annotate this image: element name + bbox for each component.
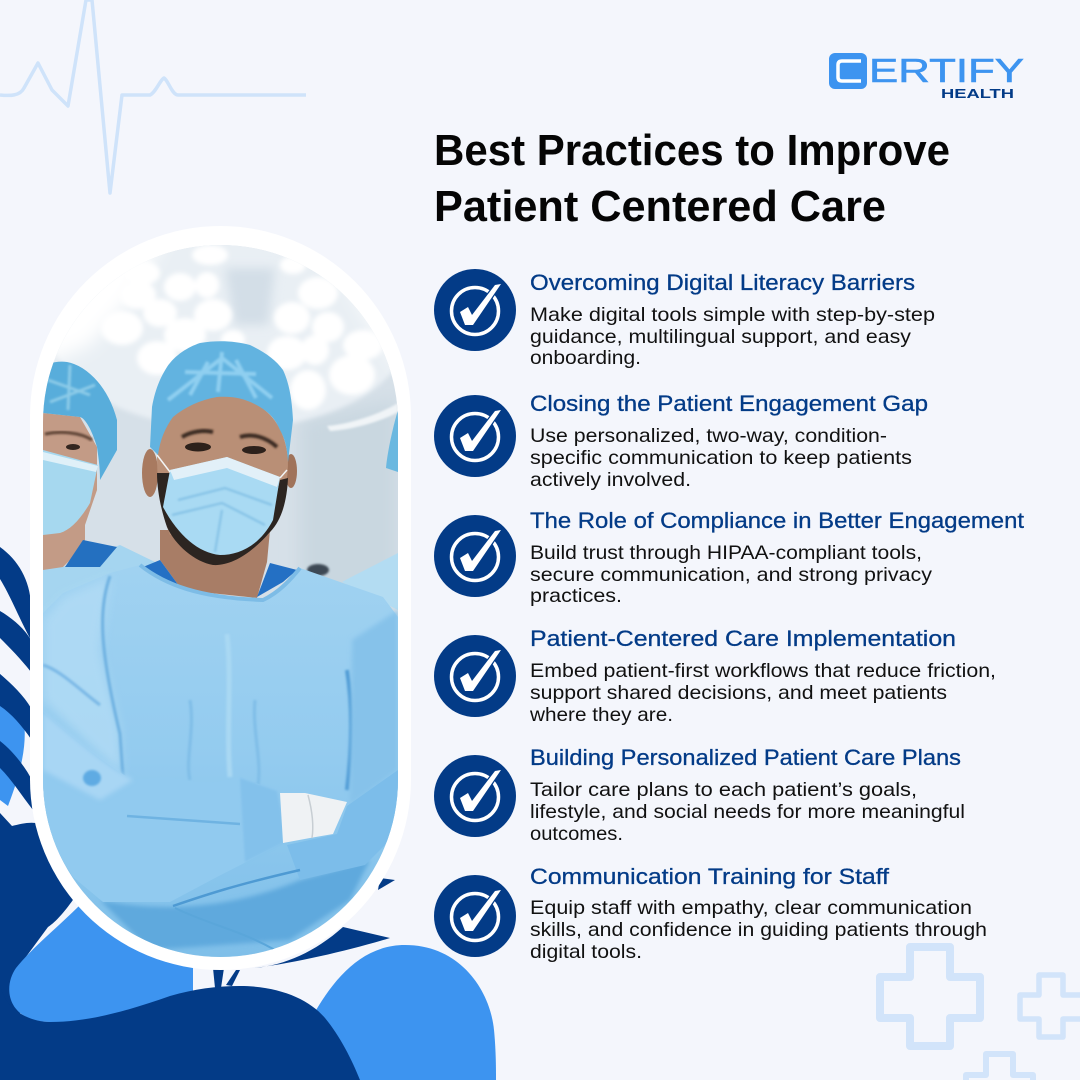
description: Embed patient-first workflows that reduce friction,	[530, 660, 996, 682]
decorative blob: light blue left	[9, 905, 193, 1030]
decorative blob: light blue right	[300, 945, 496, 1080]
left surgeon	[43, 362, 155, 640]
main surgeon gown	[43, 565, 398, 957]
icon: check	[434, 269, 516, 351]
main surgeon head	[142, 341, 297, 565]
photo background	[43, 245, 398, 957]
decorative blob: navy bottom wave	[0, 985, 360, 1080]
forearm lower shadow	[100, 860, 370, 950]
description: skills, and confidence in guiding patients through	[530, 919, 987, 941]
description	[530, 897, 987, 963]
description: actively involved.	[530, 469, 691, 491]
icon: check	[434, 395, 516, 477]
photo frame	[30, 226, 411, 970]
item 6	[434, 864, 987, 963]
description	[530, 779, 965, 845]
description: Build trust through HIPAA-compliant tools,	[530, 542, 922, 564]
description: where they are.	[529, 704, 673, 726]
description: Use personalized, two-way, condition-	[530, 425, 887, 447]
heading: Closing the Patient Engagement Gap	[530, 391, 928, 416]
description: guidance, multilingual support, and easy	[530, 326, 911, 348]
description: support shared decisions, and meet patients	[530, 682, 947, 704]
description: digital tools.	[530, 941, 642, 963]
title: Patient Centered Care	[434, 182, 886, 231]
description	[530, 304, 935, 369]
heading: Overcoming Digital Literacy Barriers	[530, 270, 915, 295]
item 2	[434, 391, 928, 491]
white glove	[280, 793, 347, 843]
background lower wall	[303, 407, 395, 584]
ears	[142, 449, 158, 497]
heading: The Role of Compliance in Better Engagement	[530, 508, 1025, 533]
decorative leaves under photo	[213, 878, 395, 988]
description	[530, 425, 912, 491]
description	[530, 542, 932, 607]
decorative leaves left	[0, 547, 33, 810]
face	[157, 396, 288, 535]
hair net	[150, 341, 293, 462]
description: lifestyle, and social needs for more meaningful	[530, 801, 965, 823]
heading: Communication Training for Staff	[530, 864, 890, 889]
decorative blob: navy left	[0, 813, 80, 1080]
main surgeon neck and scrubs	[143, 530, 297, 598]
description: onboarding.	[530, 347, 641, 369]
eyebrows	[182, 431, 277, 447]
item 3	[434, 508, 1025, 607]
fold lines	[43, 576, 351, 790]
right forearm	[287, 770, 398, 880]
left forearm	[43, 774, 244, 902]
item 1	[434, 269, 935, 369]
title: Best Practices to Improve	[434, 126, 950, 175]
photo: surgeons in operating room	[43, 235, 410, 957]
title	[434, 126, 950, 231]
eyes	[185, 442, 211, 452]
icon: check	[434, 875, 516, 957]
logo mark	[829, 53, 867, 89]
mask	[163, 457, 280, 555]
heading: Patient-Centered Care Implementation	[530, 626, 956, 651]
medical cross outlines	[880, 947, 1080, 1080]
item 5	[434, 745, 965, 845]
dark equipment spot	[307, 564, 329, 576]
icon: check	[434, 515, 516, 597]
description: practices.	[530, 585, 622, 607]
description: Tailor care plans to each patient’s goals,	[530, 779, 917, 801]
right sleeve shade	[350, 610, 398, 805]
logo subword: HEALTH	[941, 87, 1014, 101]
heading: Building Personalized Patient Care Plans	[530, 745, 961, 770]
description: specific communication to keep patients	[530, 447, 912, 469]
highlight on left sleeve	[43, 577, 122, 775]
lower creases	[173, 870, 300, 906]
logo: Certify Health	[829, 52, 1024, 101]
beard	[157, 473, 288, 565]
description: Make digital tools simple with step-by-step	[530, 304, 935, 326]
description: Equip staff with empathy, clear communication	[530, 897, 972, 919]
icon: check	[434, 755, 516, 837]
surgical light	[54, 245, 398, 432]
heartbeat line decoration	[0, 0, 306, 193]
logo word: ERTIFY	[869, 52, 1024, 89]
icon: check	[434, 635, 516, 717]
item 4	[434, 626, 996, 726]
description: secure communication, and strong privacy	[530, 564, 932, 586]
right surgeon	[342, 410, 398, 610]
description: outcomes.	[530, 823, 623, 845]
description	[529, 660, 996, 726]
